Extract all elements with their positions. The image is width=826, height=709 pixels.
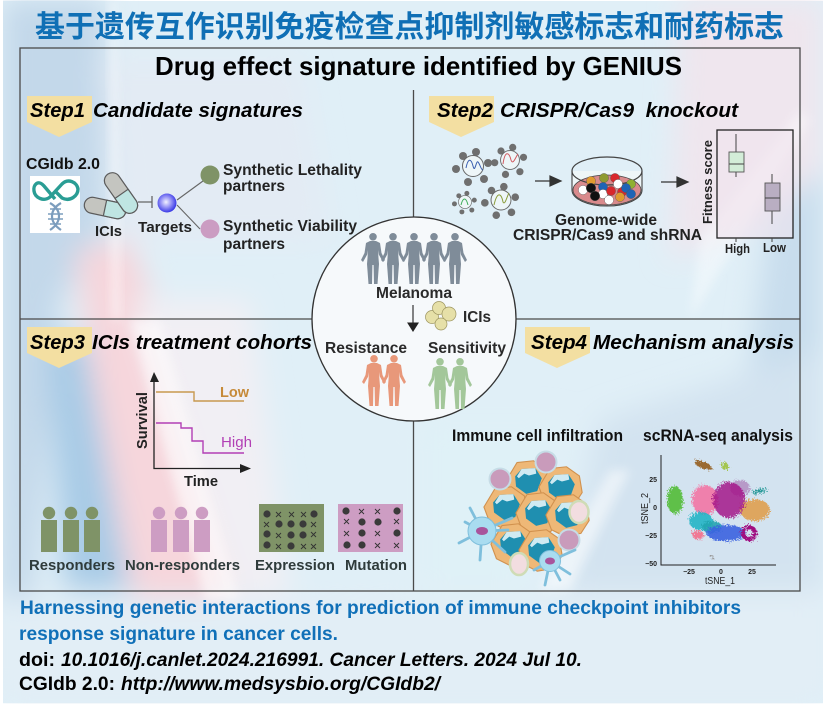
tSNE scatter plot: tSNE_1 <box>705 576 735 587</box>
resistance label: Resistance <box>325 340 407 357</box>
box plot <box>700 130 793 256</box>
tSNE scatter plot: 25 <box>748 569 756 576</box>
cohort labels: Non-responders <box>125 557 240 574</box>
database link: CGIdb 2.0: <box>19 674 115 695</box>
paper title <box>19 598 741 645</box>
icon: viruses <box>452 144 527 219</box>
melanoma label: Melanoma <box>376 285 452 302</box>
immune infiltration label: Immune cell infiltration <box>452 427 623 445</box>
database link: http://www.medsysbio.org/CGIdb2/ <box>121 674 442 695</box>
icon: target sphere <box>158 194 176 212</box>
step 2 label: CRISPR/Cas9 knockout <box>500 99 739 122</box>
step 1 label: Candidate signatures <box>93 99 303 122</box>
icon: resistant patients <box>362 355 406 406</box>
survival chart: Survival <box>135 392 151 449</box>
icon: ICIs pills <box>426 302 456 330</box>
sensitivity label: Sensitivity <box>428 340 506 357</box>
icon: non-responders <box>151 507 210 552</box>
panel: step 2 CRISPR knockout <box>429 96 793 256</box>
panel: step 3 treatment cohorts <box>27 327 407 574</box>
panel: central melanoma circle <box>312 217 516 421</box>
survival chart <box>135 372 252 490</box>
box plot: Fitness score <box>700 140 715 224</box>
dish caption <box>513 212 702 244</box>
panel: step 1 candidate signatures <box>26 96 362 253</box>
icon: CGIdb logo <box>30 176 80 233</box>
doi line: doi: <box>19 650 55 671</box>
heading: drug effect signature: Drug effect signature identified by GENIUS <box>155 51 682 81</box>
panel: step 4 mechanism analysis <box>452 327 794 587</box>
arrow <box>408 305 418 331</box>
CGIdb label: CGIdb 2.0 <box>26 156 100 173</box>
survival chart: High <box>221 434 252 451</box>
icon: ICI pills <box>83 170 141 220</box>
box plot: Low <box>763 241 786 255</box>
synthetic viability label: partners <box>223 236 285 253</box>
synthetic lethality label <box>223 162 362 195</box>
survival chart: Low <box>220 385 250 401</box>
icon: mutation matrix <box>338 504 403 552</box>
main frame <box>20 48 800 591</box>
title: 基于遗传互作识别免疫检查点抑制剂敏感标志和耐药标志 <box>35 11 784 44</box>
targets label: Targets <box>138 219 192 236</box>
survival chart: Time <box>184 474 218 490</box>
step 2 label: Step2 <box>437 99 494 122</box>
dish caption: CRISPR/Cas9 and shRNA <box>513 227 702 244</box>
step 4 label <box>525 327 794 368</box>
tSNE scatter plot: −25 <box>683 569 695 576</box>
synthetic lethality node <box>200 166 220 184</box>
icon: responders <box>41 507 100 552</box>
tSNE scatter plot: −25 <box>645 533 657 540</box>
icon: culture dish <box>572 157 642 206</box>
synthetic viability node <box>200 220 220 238</box>
synthetic viability label <box>223 218 357 253</box>
icon: expression matrix <box>259 504 324 552</box>
tSNE scatter plot: −50 <box>645 561 657 568</box>
connector lines <box>177 181 203 229</box>
tSNE scatter plot: 0 <box>653 505 657 512</box>
step 2 label <box>429 96 739 137</box>
box plot: High <box>725 242 750 256</box>
step 3 label: ICIs treatment cohorts <box>92 331 312 354</box>
doi line: 10.1016/j.canlet.2024.216991. Cancer Letters. 2024 Jul 10. <box>61 650 582 671</box>
synthetic lethality label: Synthetic Lethality <box>223 162 362 179</box>
illustration: immune cell infiltration <box>459 452 589 585</box>
arrow <box>535 176 561 186</box>
step 3 label <box>27 327 312 368</box>
step 4 label: Step4 <box>531 331 588 354</box>
synthetic viability label: Synthetic Viability <box>223 218 357 235</box>
ICIs label: ICIs <box>95 223 122 240</box>
step 1 label <box>27 96 303 137</box>
step 1 label: Step1 <box>30 99 85 122</box>
synthetic lethality label: partners <box>223 178 285 195</box>
scRNA-seq label: scRNA-seq analysis <box>643 427 793 445</box>
tSNE scatter plot: tSNE_2 <box>640 493 651 524</box>
tSNE scatter plot <box>640 455 776 587</box>
cohort labels <box>29 557 407 574</box>
citation block <box>19 598 741 695</box>
icon: melanoma patients <box>361 233 467 284</box>
tSNE scatter plot: 0 <box>719 569 723 576</box>
arrow <box>661 177 688 187</box>
dish caption: Genome-wide <box>555 212 657 229</box>
step 3 label: Step3 <box>30 331 86 354</box>
inhibition symbol <box>138 196 152 208</box>
paper title: response signature in cancer cells. <box>19 624 338 645</box>
icon: sensitive patients <box>428 358 472 409</box>
ICIs label: ICIs <box>463 309 491 326</box>
paper title: Harnessing genetic interactions for prediction of immune checkpoint inhibitors <box>20 598 741 619</box>
tSNE scatter plot: 25 <box>649 477 657 484</box>
step 4 label: Mechanism analysis <box>593 331 794 354</box>
cohort labels: Responders <box>29 557 115 574</box>
cohort labels: Expression <box>255 557 335 574</box>
cohort labels: Mutation <box>345 557 407 574</box>
